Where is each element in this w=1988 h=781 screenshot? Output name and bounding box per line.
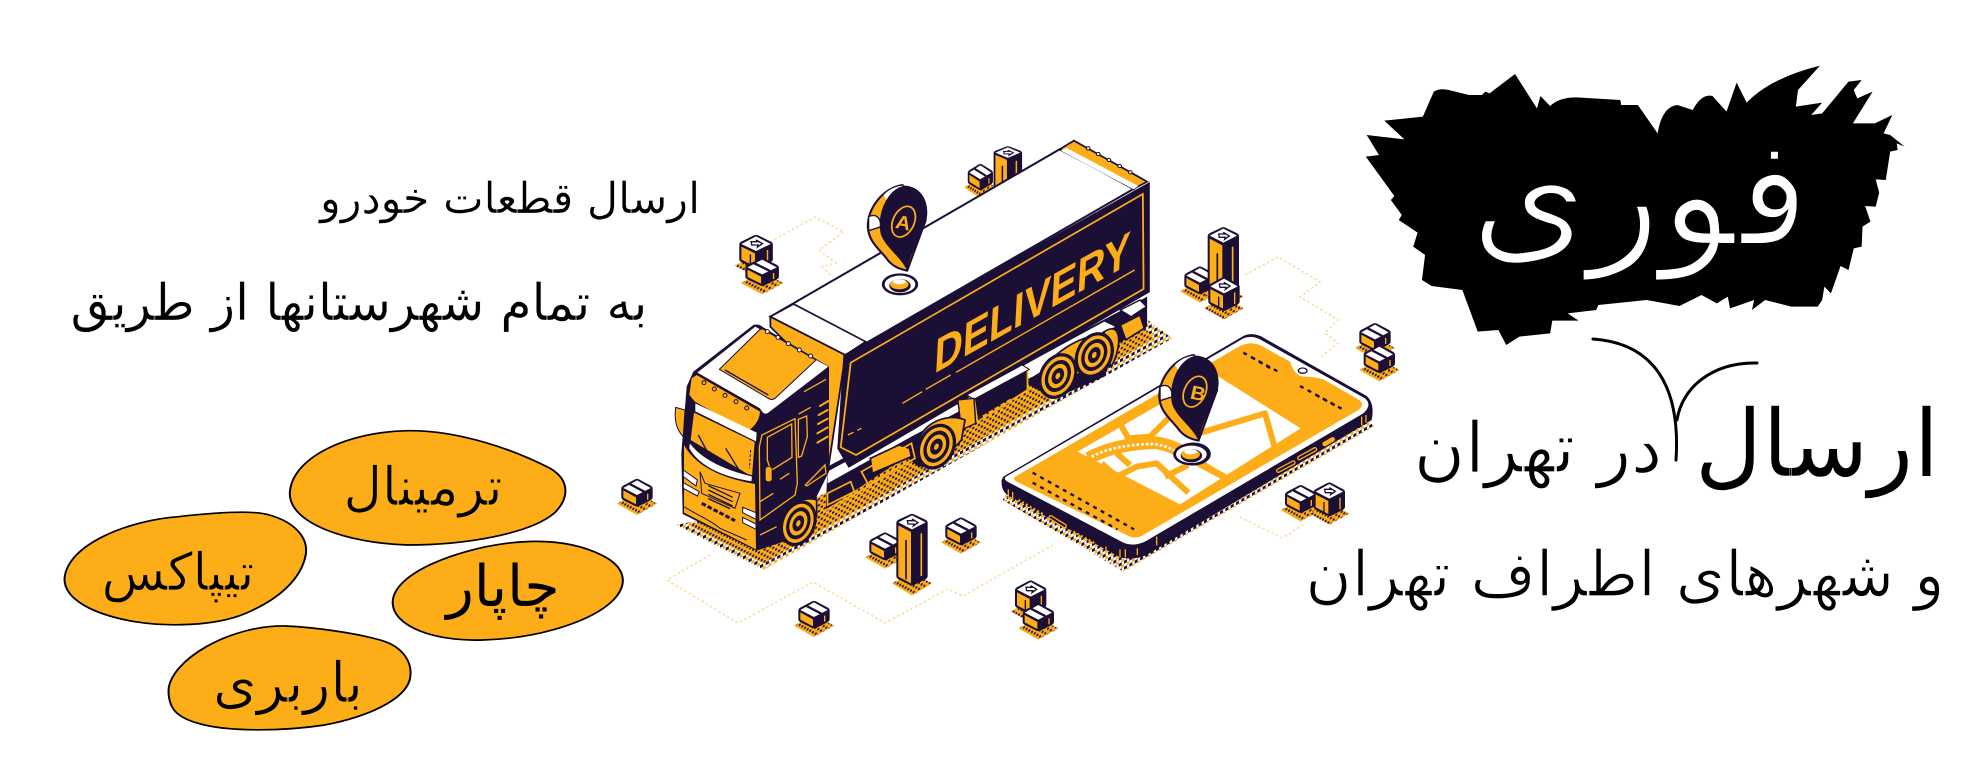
cab silhouette: [681, 325, 829, 551]
location pin A: [868, 185, 927, 295]
badge: chapar: چاپار: [443, 554, 560, 620]
flourish strokes: [1593, 339, 1757, 460]
parcels left of trailer: [735, 235, 784, 294]
fuel tank and chassis parts: [826, 443, 915, 510]
map marker base: [1177, 443, 1210, 465]
brush blob with title: [1366, 66, 1905, 345]
badge: barbari: باربری: [213, 651, 363, 716]
parcels right of phone top: [1355, 323, 1399, 381]
phone screen: [1014, 343, 1362, 537]
trailer lettering: DELIVERY: [933, 220, 1132, 385]
middle wheel: [910, 417, 965, 475]
parcel beside cab: [617, 479, 657, 515]
badge: tipax: [65, 512, 306, 625]
cab door outlines: [759, 379, 828, 535]
door handle: [765, 467, 772, 482]
parcels: [617, 227, 1399, 640]
tall parcel group under truck: [865, 514, 981, 595]
badge: terminal: ترمینال: [343, 457, 503, 518]
parcels above phone: [1180, 227, 1244, 319]
truck cab: [675, 325, 829, 552]
trailer top: [770, 149, 1135, 355]
cab roof: [697, 327, 828, 414]
left line 1: ارسال قطعات خودرو: [318, 174, 700, 224]
location pin B: [1159, 355, 1219, 465]
badge: tipax: تیپاکس: [102, 543, 254, 603]
rear wheels: [1031, 327, 1121, 404]
rear mudguard and bumper: [1097, 300, 1146, 367]
phone rim: [1005, 337, 1368, 545]
heading: in Tehran: در تهران: [1414, 407, 1662, 489]
parcels right of phone bottom: [1281, 482, 1349, 525]
trailer side panel: [838, 183, 1149, 467]
smartphone with map: [1002, 334, 1374, 572]
left line 2: به تمام شهرستانها از طریق: [70, 273, 648, 333]
badge: chapar: [393, 541, 623, 640]
carrier badges: [65, 431, 623, 730]
truck illustration: [676, 141, 1172, 570]
map panel: [1078, 373, 1301, 504]
title word: فوری: [1470, 107, 1810, 282]
screen dot rows: [1033, 353, 1344, 529]
parcels behind trailer: [964, 146, 1026, 207]
phone body: [1002, 334, 1373, 559]
phone shadow: [1003, 420, 1374, 572]
dotted route on map: [1092, 444, 1177, 457]
map roads: [1088, 413, 1275, 493]
dashed delivery route: [667, 217, 1338, 623]
pin letter A: A: [893, 212, 913, 235]
trailer rear roof edge: [1060, 141, 1147, 190]
white undercarriage strip: [827, 322, 1115, 483]
front wheel: [773, 495, 823, 552]
trailer side trim: [841, 194, 1144, 455]
camera notch: [1298, 368, 1307, 373]
parcels under phone: [1011, 580, 1058, 640]
windshield: [689, 403, 757, 482]
roof orange panel: [719, 329, 816, 399]
badge: terminal: [290, 431, 565, 545]
front grille and bumper: [683, 445, 756, 549]
parcel on route: [794, 601, 834, 637]
underbody chassis: [826, 297, 1147, 510]
ground shadow of truck: [676, 319, 1172, 570]
pin letter B: B: [1188, 382, 1208, 406]
line: surrounding cities: و شهرهای اطراف تهران: [1305, 538, 1945, 612]
cab brow: [689, 375, 760, 432]
phone side details: [1008, 415, 1366, 557]
side mirror: [675, 407, 685, 437]
badge: barbari: [169, 626, 411, 730]
heading: send: ارسال: [1695, 390, 1939, 499]
trailer front band: [770, 317, 845, 473]
side storage box: [958, 365, 1029, 430]
